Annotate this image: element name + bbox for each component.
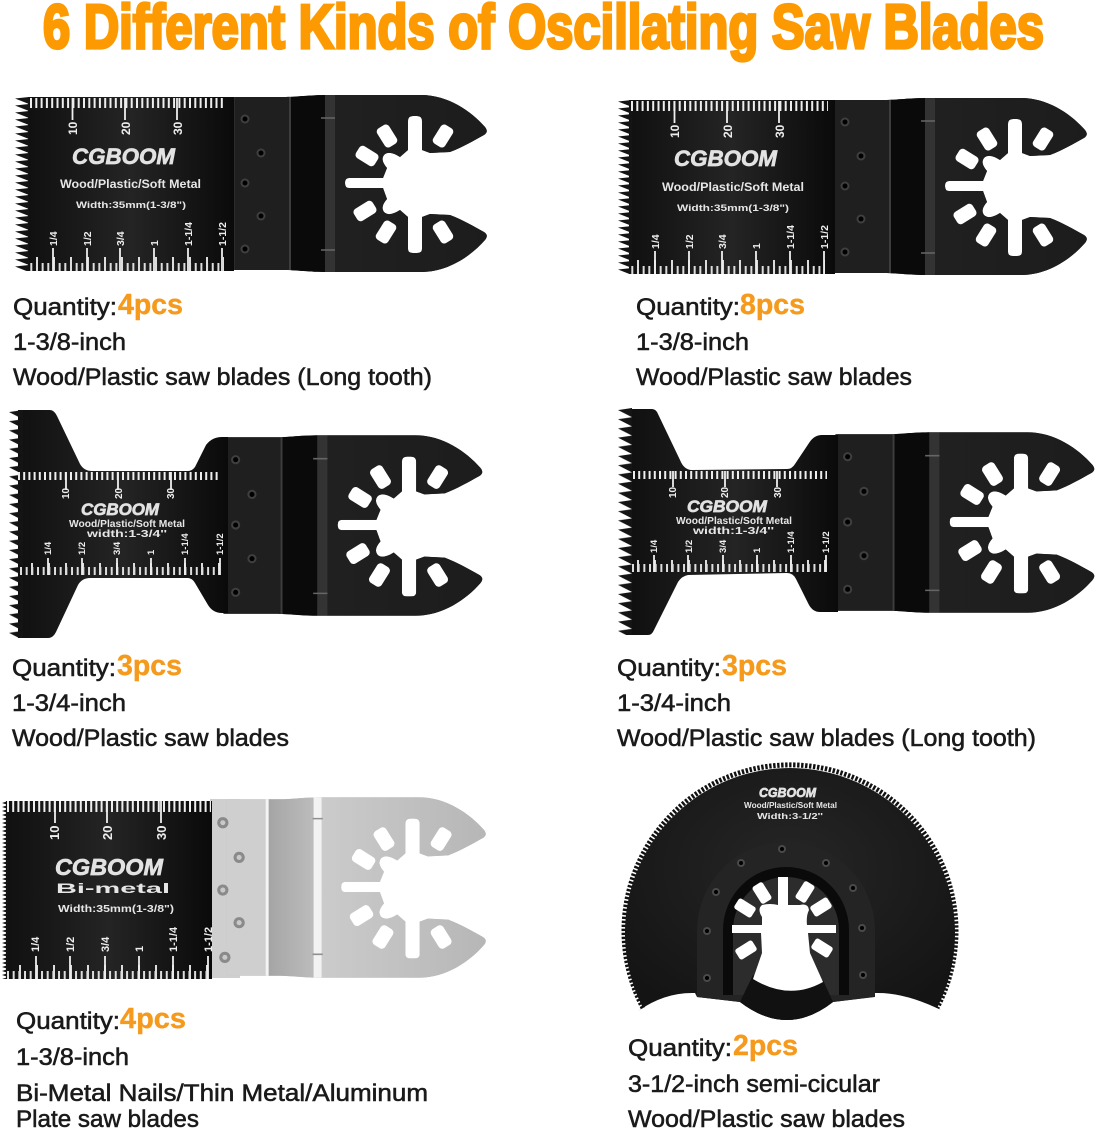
blade 2 illustration: CGBOOM (674, 146, 778, 171)
blade 2 illustration: 1 (751, 243, 763, 249)
blade 5 illustration: 1-1/4 (168, 926, 180, 952)
blade 2 illustration: 1/4 (650, 234, 662, 249)
blade 5 illustration: 20 (100, 826, 115, 840)
blade 6 caption: 2pcs (733, 1030, 798, 1062)
blade 4 illustration: CGBOOM (687, 497, 768, 516)
blade 5 caption: Plate saw blades (16, 1106, 199, 1133)
blade 4 caption: 1-3/4-inch (617, 690, 731, 717)
panel: blade 1 long tooth 1-3/8 (13, 88, 505, 391)
blade 1 illustration: 3/4 (115, 231, 127, 246)
blade 6 caption: Wood/Plastic saw blades (628, 1106, 905, 1133)
blade 2 caption: Wood/Plastic saw blades (636, 364, 912, 391)
blade 1 caption: Quantity: (13, 294, 117, 321)
blade 1 illustration: 1-1/2 (217, 222, 229, 246)
blade 3 caption: Quantity: (12, 655, 116, 682)
blade 2 illustration: Wood/Plastic/Soft Metal (662, 180, 804, 194)
blade 2 illustration: Width:35mm(1-3/8") (677, 203, 789, 214)
blade 6 illustration: Wood/Plastic/Soft Metal (744, 801, 837, 810)
blade 4 illustration: 20 (720, 486, 731, 498)
blade 2 caption: Quantity: (636, 294, 740, 321)
blade 4 caption: Quantity: (617, 655, 721, 682)
blade 1 illustration: 1/4 (48, 231, 60, 246)
blade 4 illustration: 3/4 (718, 539, 729, 553)
blade 3 illustration: width:1-3/4'' (86, 529, 167, 540)
blade 3 illustration: 1/4 (43, 541, 54, 555)
blade 3 illustration: 1-1/4 (180, 533, 191, 555)
blade 3 caption: Wood/Plastic saw blades (12, 725, 289, 752)
blade 6 illustration: CGBOOM (759, 785, 817, 800)
blade 3 illustration: 1-1/2 (215, 533, 226, 555)
blade 5 caption: Bi-Metal Nails/Thin Metal/Aluminum (16, 1080, 428, 1107)
blade 6 caption: 3-1/2-inch semi-cicular (628, 1071, 880, 1098)
blade 4 caption (617, 650, 1036, 752)
blade 2 illustration: 1-1/4 (785, 225, 797, 249)
blade 2 illustration: 3/4 (717, 234, 729, 249)
blade 4 caption: Wood/Plastic saw blades (Long tooth) (617, 725, 1036, 752)
blade 4 illustration: 1-1/2 (821, 531, 832, 553)
panel: blade 3 1-3/4 flared (9, 410, 501, 752)
blade 1 illustration: 1/2 (82, 231, 94, 246)
blade 3 caption: 1-3/4-inch (12, 690, 126, 717)
blade 2 illustration (618, 91, 1096, 281)
blade 4 illustration: 1/2 (684, 540, 695, 553)
blade 5 illustration: 10 (47, 826, 62, 840)
blade 4 caption: 3pcs (722, 650, 787, 682)
blade 5 illustration (2, 790, 505, 984)
blade 4 illustration: 1-1/4 (786, 531, 797, 553)
blade 2 illustration: 1-1/2 (819, 225, 831, 249)
blade 5 caption: 4pcs (120, 1003, 186, 1035)
blade 2 illustration: 20 (721, 124, 735, 138)
blade 3 illustration: 3/4 (112, 541, 123, 555)
blade 5 illustration: Width:35mm(1-3/8") (58, 904, 174, 915)
blade 1 illustration: 20 (119, 121, 133, 135)
blade 3 illustration: CGBOOM (81, 500, 160, 519)
blade 3 illustration (9, 410, 501, 638)
blade 1 caption: Wood/Plastic saw blades (Long tooth) (13, 364, 432, 391)
panel: blade 5 bi-metal (2, 790, 505, 1133)
blade 2 caption (636, 289, 912, 391)
blade 6 illustration (624, 765, 956, 1020)
blade 5 illustration: 3/4 (100, 936, 112, 952)
blade 5 illustration: Bi-metal (56, 880, 170, 896)
blade 4 illustration: width:1-3/4'' (692, 526, 774, 537)
blade 1 illustration: 1-1/4 (183, 222, 195, 246)
blade 4 illustration: 1/4 (649, 539, 660, 553)
blade 5 illustration: 30 (154, 826, 169, 840)
blade 5 illustration: 1/4 (30, 936, 42, 952)
blade 1 illustration: CGBOOM (72, 144, 176, 169)
blade 3 illustration: 10 (61, 487, 72, 499)
blade 6 caption: Quantity: (628, 1035, 732, 1062)
blade 5 caption: 1-3/8-inch (16, 1044, 129, 1071)
blade 1 caption (13, 289, 432, 391)
panel: blade 2 1-3/8 (618, 91, 1096, 391)
panel: blade 6 semi-circular (624, 765, 956, 1133)
blade 5 illustration: 1-1/2 (203, 927, 215, 952)
blade 4 illustration: Wood/Plastic/Soft Metal (676, 516, 792, 527)
panel: blade 4 1-3/4 long tooth flared (617, 408, 1096, 752)
blade 1 caption: 1-3/8-inch (13, 329, 126, 356)
blade 2 caption: 8pcs (740, 289, 805, 321)
blade 2 illustration: 10 (668, 124, 682, 138)
blade 5 illustration: CGBOOM (55, 854, 164, 880)
blade 3 illustration: 30 (166, 487, 177, 499)
blade 5 caption: Quantity: (16, 1008, 120, 1035)
blade 1 illustration: Width:35mm(1-3/8") (76, 200, 186, 211)
blade 1 illustration: Wood/Plastic/Soft Metal (60, 177, 201, 191)
blade 6 illustration: Width:3-1/2'' (757, 811, 823, 821)
blade 4 illustration: 30 (773, 486, 784, 498)
blade 3 illustration: 1/2 (77, 542, 88, 555)
blade 1 caption: 4pcs (118, 289, 183, 321)
blade 1 illustration: 10 (66, 121, 80, 135)
blade 3 caption (12, 650, 289, 752)
blade 4 illustration: 1 (752, 547, 763, 553)
blade 2 illustration: 30 (773, 124, 787, 138)
blade 4 illustration (618, 408, 1096, 635)
blade 6 caption (628, 1030, 905, 1133)
blade 3 caption: 3pcs (117, 650, 182, 682)
blade 3 illustration: 1 (146, 549, 157, 555)
blade 3 illustration: 20 (114, 487, 125, 499)
blade 4 illustration: 10 (668, 486, 679, 498)
blade 1 illustration (15, 88, 505, 278)
blade 5 illustration: 1/2 (65, 937, 77, 952)
blade 5 caption (16, 1003, 428, 1133)
blade 2 illustration: 1/2 (684, 234, 696, 249)
blade 1 illustration: 30 (171, 121, 185, 135)
blade 5 illustration: 1 (134, 946, 146, 952)
blade 3 illustration: Wood/Plastic/Soft Metal (69, 519, 185, 530)
blade 1 illustration: 1 (149, 240, 161, 246)
blade 2 caption: 1-3/8-inch (636, 329, 749, 356)
